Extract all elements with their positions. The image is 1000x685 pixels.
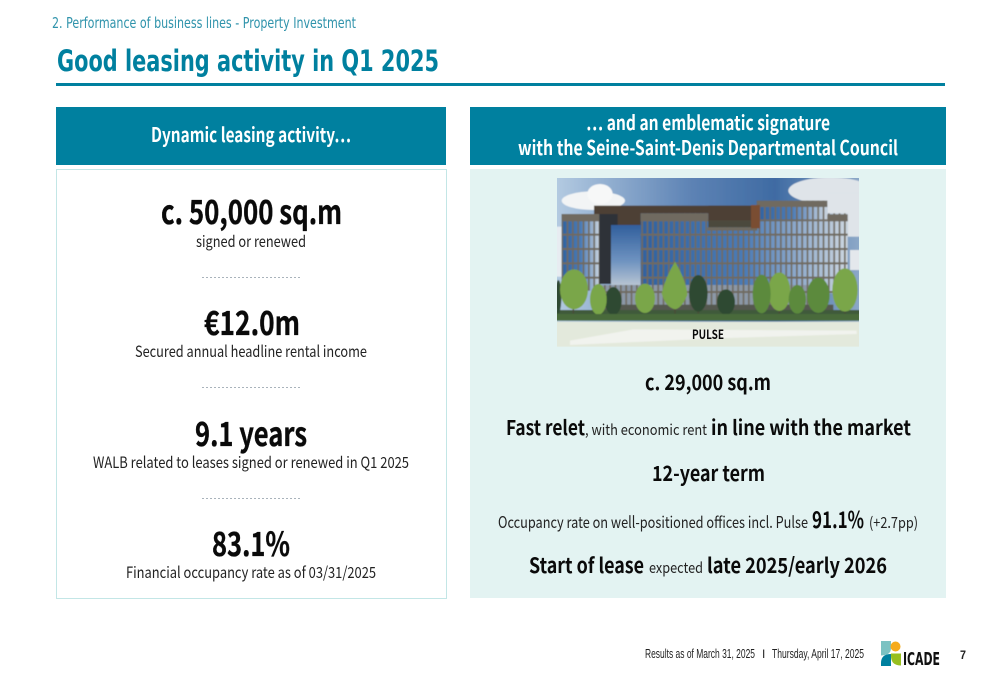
metric: WALB <box>93 408 409 473</box>
metric: occupancy: Financial occupancy rate as of 03/31/2025 <box>126 561 376 583</box>
metric: surface signed: signed or renewed <box>196 230 306 252</box>
fact: surface: c. 29,000 sq.m <box>645 367 771 397</box>
metric: surface signed: c. 50,000 sq.m <box>161 186 342 234</box>
metric: occupancy: 83.1% <box>212 518 290 566</box>
metric: WALB: WALB related to leases signed or renewed in Q1 2025 <box>93 451 409 473</box>
fact: occupancy: 91.1% <box>812 501 864 535</box>
section breadcrumb: 2. Performance of business lines - Property Investment <box>52 14 356 32</box>
photo: Pulse building <box>555 176 872 349</box>
fact: fast relet: Fast relet <box>506 411 585 441</box>
panel: emblematic signature <box>470 107 946 598</box>
icon: ICADE logo: ICADE <box>903 649 940 670</box>
metric: rental income: Secured annual headline rental income <box>135 340 367 362</box>
fact: occupancy <box>498 501 918 535</box>
left panel body <box>56 170 446 598</box>
icon: ICADE logo <box>881 641 940 670</box>
page number: 7 <box>960 648 966 662</box>
left panel header <box>56 107 446 165</box>
metric: rental income: €12.0m <box>204 297 300 345</box>
right panel body <box>470 169 946 598</box>
fact: fast relet: in line with the market <box>711 411 911 441</box>
fact: start of lease <box>529 550 887 580</box>
fact: term: 12-year term <box>652 458 765 488</box>
metric: surface signed <box>161 186 342 252</box>
left panel header: Dynamic leasing activity… <box>151 119 351 148</box>
title: Good leasing activity in Q1 2025 <box>57 44 439 78</box>
footer text: I <box>762 647 765 661</box>
fact: occupancy: (+2.7pp) <box>869 512 918 533</box>
fact: fast relet: , with economic rent <box>585 419 707 440</box>
fact: fast relet <box>506 411 911 441</box>
footer text: Thursday, April 17, 2025 <box>772 647 864 661</box>
right panel header <box>470 107 946 165</box>
metric: rental income <box>135 297 367 362</box>
footer text: Results as of March 31, 2025 <box>645 647 755 661</box>
metric: WALB: 9.1 years <box>195 408 307 456</box>
right panel header: … and an emblematic signature <box>586 107 830 136</box>
photo label: PULSE <box>692 324 724 343</box>
metric: occupancy <box>126 518 376 583</box>
fact: start of lease: expected <box>649 557 703 578</box>
title rule <box>56 83 945 86</box>
fact: start of lease: Start of lease <box>529 550 644 580</box>
fact: start of lease: late 2025/early 2026 <box>707 550 887 580</box>
fact: occupancy: Occupancy rate on well-positioned offices incl. Pulse <box>498 509 808 533</box>
right panel header: with the Seine-Saint-Denis Departmental Council <box>518 132 898 161</box>
panel: dynamic leasing activity <box>56 107 446 598</box>
